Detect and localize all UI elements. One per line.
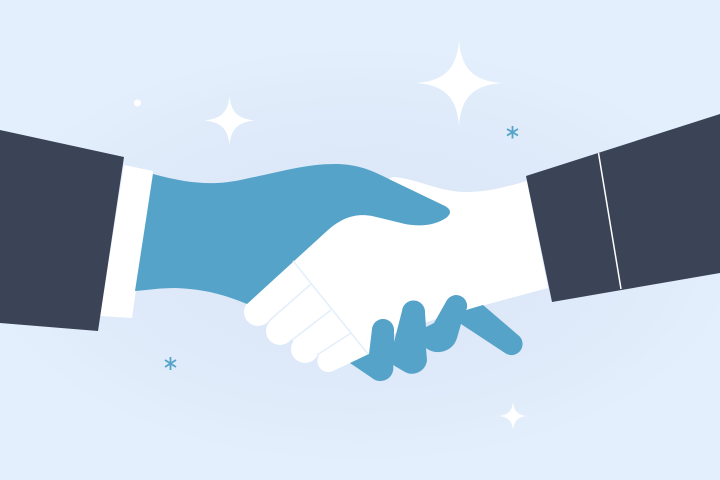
blue hand <box>135 164 450 304</box>
right jacket sleeve <box>526 114 720 302</box>
white hand <box>244 177 548 372</box>
icon: medium sparkle <box>204 96 255 145</box>
left shirt cuff <box>100 165 153 318</box>
icon: large sparkle <box>416 40 502 126</box>
hand palm and wrist <box>250 177 548 363</box>
finger lines <box>270 261 368 355</box>
icon: asterisk left <box>165 357 176 370</box>
white fingertips <box>244 298 350 372</box>
blue interlocked fingers <box>350 295 523 381</box>
icon: small sparkle <box>499 402 527 430</box>
right sleeve seam <box>598 153 621 289</box>
icon: asterisk right <box>507 126 518 138</box>
left jacket sleeve <box>0 130 124 331</box>
icon: dot <box>134 100 141 106</box>
